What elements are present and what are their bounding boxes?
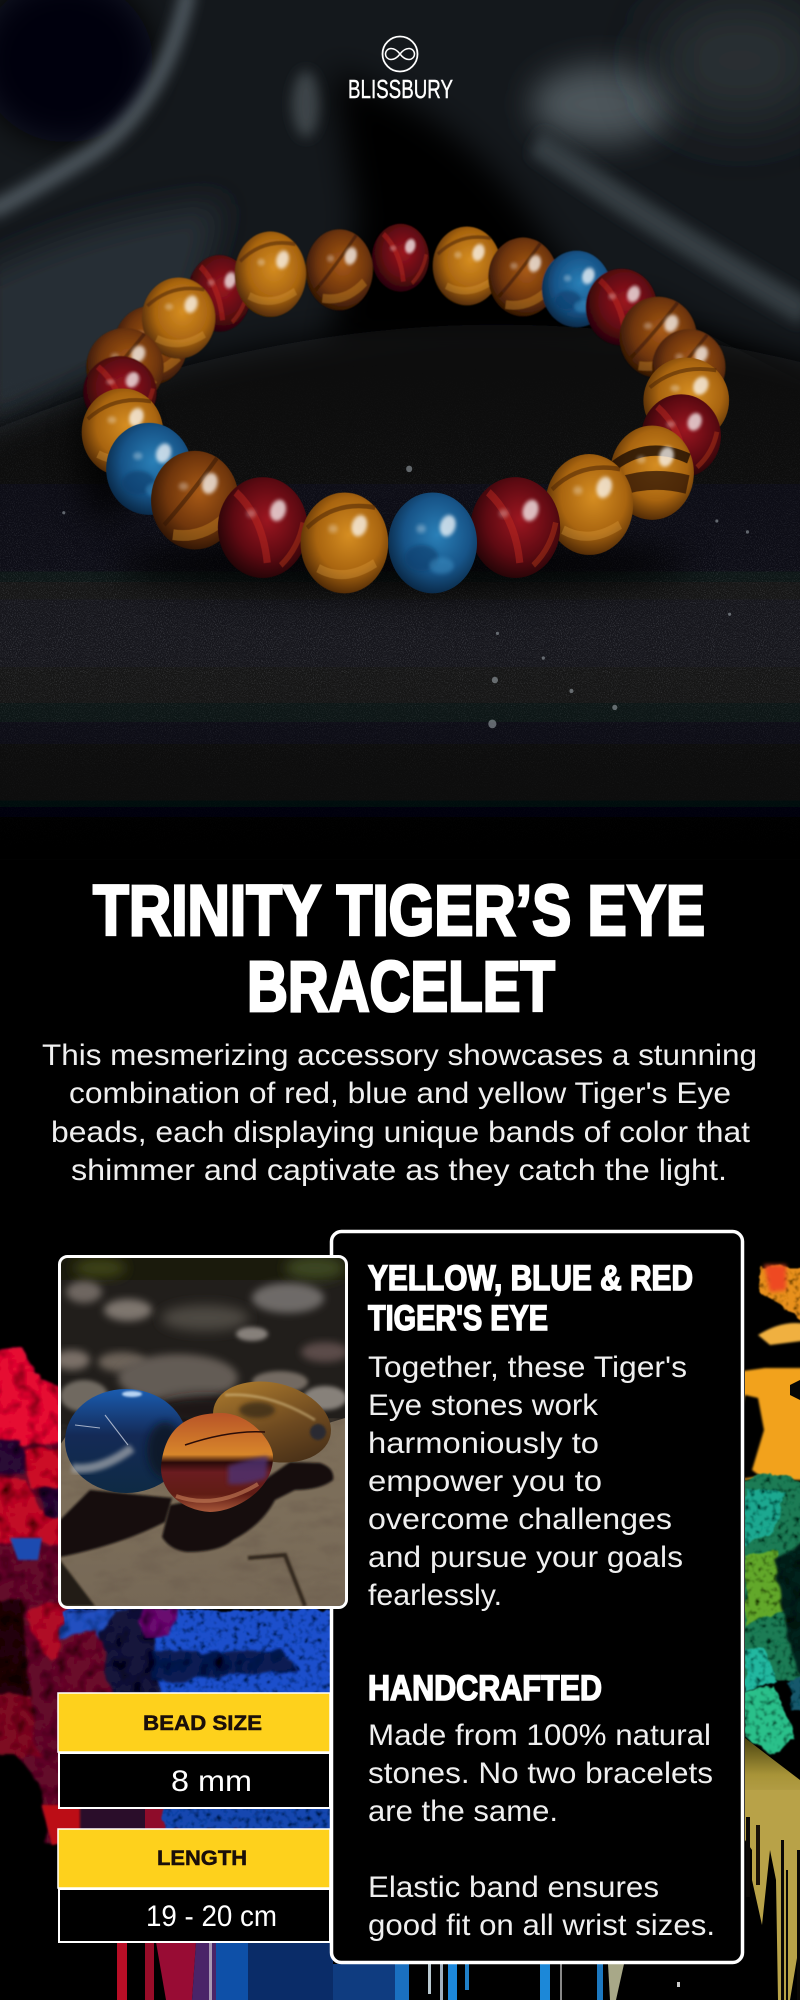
paint splash: right orange and green bbox=[745, 1261, 800, 2000]
text: stone description: overcome challenges bbox=[368, 1503, 672, 1536]
text: stone description: and pursue your goals bbox=[368, 1541, 683, 1574]
intro paragraph: beads, each displaying unique bands of color that bbox=[51, 1116, 750, 1149]
heading: stone type: YELLOW, BLUE & RED bbox=[368, 1259, 693, 1298]
intro paragraph: shimmer and captivate as they catch the light. bbox=[71, 1154, 727, 1187]
intro paragraph: combination of red, blue and yellow Tiger's Eye bbox=[69, 1077, 731, 1110]
logo: Blissbury bbox=[348, 36, 453, 104]
front beads bbox=[82, 358, 729, 593]
text: stone description: empower you to bbox=[368, 1465, 602, 1498]
bracelet bbox=[82, 224, 729, 593]
text: handcrafted description: stones. No two bracelets bbox=[368, 1757, 713, 1790]
panel: description card bbox=[332, 1232, 742, 1962]
photo: tiger's eye stones bbox=[54, 1256, 349, 1608]
spec table: bead size bbox=[58, 1693, 330, 1808]
heading: stone type bbox=[368, 1259, 693, 1338]
brand name: BLISSBURY bbox=[348, 74, 453, 104]
icon: infinity ring bbox=[382, 36, 418, 72]
text: handcrafted description: good fit on all wrist sizes. bbox=[368, 1909, 715, 1942]
intro paragraph bbox=[42, 1039, 757, 1187]
text: stone description: Eye stones work bbox=[368, 1389, 598, 1422]
text: handcrafted description: are the same. bbox=[368, 1795, 558, 1828]
text: stone description: harmoniously to bbox=[368, 1427, 599, 1460]
title: BRACELET bbox=[247, 948, 555, 1027]
heading: stone type: TIGER'S EYE bbox=[368, 1299, 548, 1338]
paint drips: bottom bbox=[117, 1942, 680, 2000]
paint splash: left red and blue bbox=[0, 1347, 340, 1845]
spec table: length bbox=[58, 1829, 330, 1942]
text: handcrafted description: Made from 100% natural bbox=[368, 1719, 711, 1752]
text: handcrafted description: Elastic band ensures bbox=[368, 1871, 659, 1904]
fabric sparkles bbox=[62, 466, 749, 728]
text: stone description: Together, these Tiger's bbox=[368, 1351, 687, 1384]
title bbox=[93, 872, 705, 1027]
brown stone bbox=[213, 1382, 331, 1462]
label: bead size: BEAD SIZE bbox=[143, 1712, 262, 1735]
hero photo: bracelet on dark fabric bbox=[0, 0, 800, 817]
text: stone description: fearlessly. bbox=[368, 1579, 502, 1612]
blue stone bbox=[65, 1389, 187, 1493]
label: length: LENGTH bbox=[157, 1847, 247, 1870]
tiger stone bbox=[161, 1413, 273, 1512]
value: 8 mm: 8 mm bbox=[171, 1765, 252, 1798]
heading: handcrafted: HANDCRAFTED bbox=[368, 1669, 602, 1708]
intro paragraph: This mesmerizing accessory showcases a stunning bbox=[42, 1039, 757, 1072]
back beads bbox=[83, 224, 726, 428]
value: 19 - 20 cm: 19 - 20 cm bbox=[146, 1900, 277, 1933]
text: handcrafted description bbox=[368, 1719, 715, 1942]
text: stone description bbox=[368, 1351, 687, 1612]
